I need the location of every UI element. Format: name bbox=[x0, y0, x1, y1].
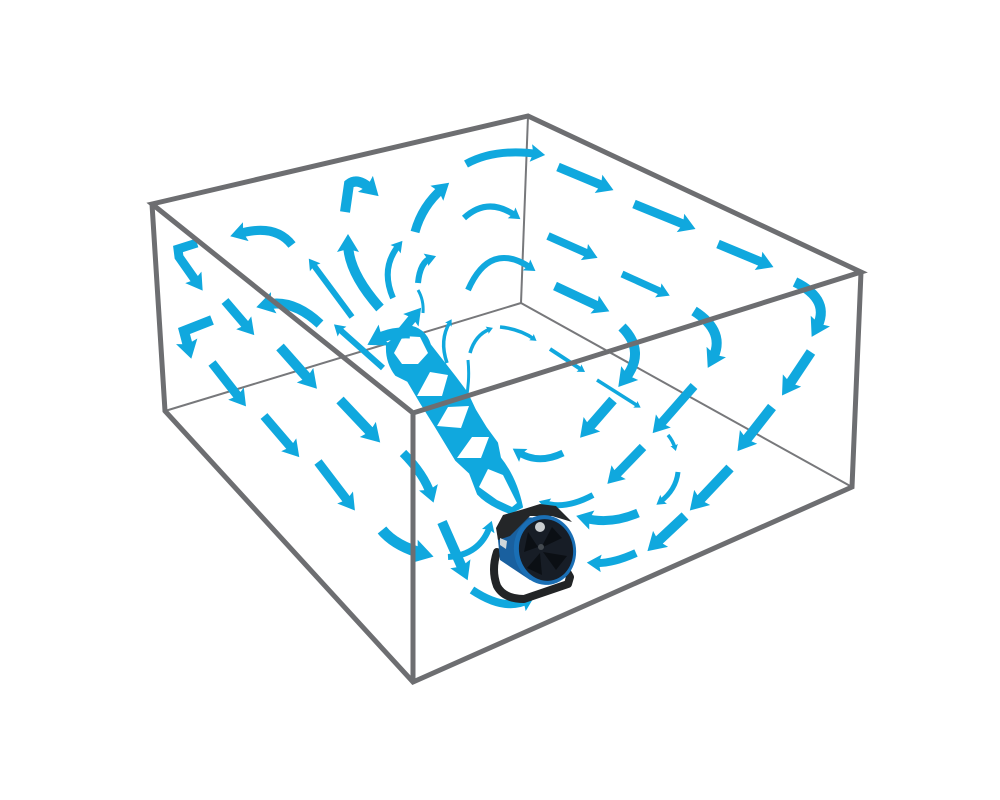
fan body bbox=[497, 517, 560, 580]
icon: blue floor fan bbox=[494, 504, 582, 599]
fan ring bbox=[508, 510, 582, 590]
arrows: floor arcs near fan bbox=[472, 452, 638, 604]
motor highlight bbox=[535, 522, 545, 532]
arrows: ceiling burst from vortex bbox=[238, 182, 469, 400]
fan handle bbox=[496, 504, 572, 540]
room front edges bbox=[152, 116, 861, 682]
fan grille bbox=[514, 515, 578, 585]
arrows: ceiling arches bbox=[464, 152, 538, 353]
fan stand bbox=[494, 552, 570, 599]
arrows: back wall straight rows bbox=[548, 167, 766, 308]
arrows: right wall curved and diagonal bbox=[550, 282, 821, 545]
fan blades bbox=[524, 527, 567, 575]
vortex twist bbox=[376, 314, 522, 513]
arrows: left wall bbox=[178, 243, 490, 572]
room back edges bbox=[165, 116, 852, 487]
